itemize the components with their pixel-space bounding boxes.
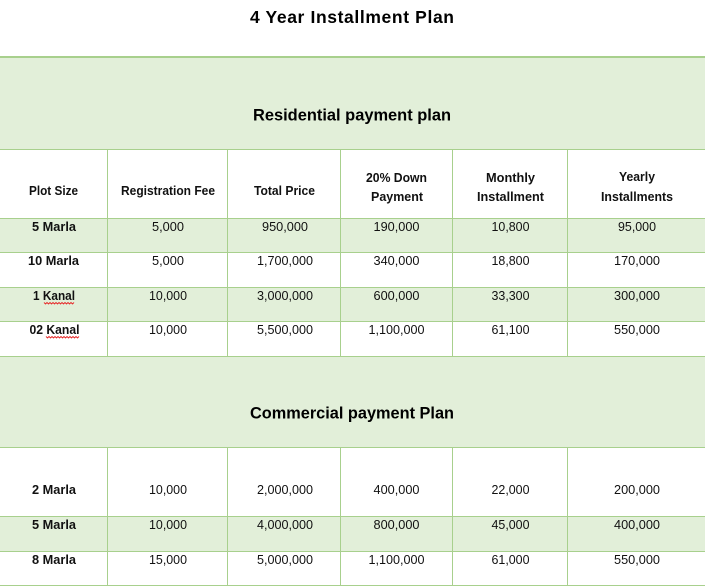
commercial row: 2 Marla: 400,000 bbox=[374, 483, 420, 497]
residential row: 10 Marla: 18,800 bbox=[492, 254, 530, 268]
residential row: 10 Marla: 170,000 bbox=[614, 254, 660, 268]
residential table header row: Monthly bbox=[486, 171, 535, 185]
residential row: 02 Kanal bbox=[30, 323, 660, 338]
residential row: 02 Kanal: 550,000 bbox=[614, 323, 660, 337]
commercial row: 8 Marla: 550,000 bbox=[614, 553, 660, 567]
title: 4 Year Installment Plan bbox=[250, 7, 454, 27]
residential row: 1 Kanal: 3,000,000 bbox=[257, 289, 313, 303]
commercial row: 5 Marla: 4,000,000 bbox=[257, 518, 313, 532]
commercial row: 2 Marla: 2 Marla bbox=[32, 483, 77, 497]
commercial row: 5 Marla bbox=[32, 518, 660, 532]
residential table header row: 20% Down bbox=[366, 171, 427, 185]
residential row: 02 Kanal: 1,100,000 bbox=[368, 323, 425, 337]
residential row: 02 Kanal: 61,100 bbox=[492, 323, 530, 337]
residential table header row: Registration Fee bbox=[121, 184, 215, 198]
residential row: 1 Kanal: 1 Kanal bbox=[33, 289, 75, 303]
commercial row: 5 Marla: 800,000 bbox=[374, 518, 420, 532]
residential row: 5 Marla: 950,000 bbox=[262, 220, 308, 234]
residential row: 5 Marla: 95,000 bbox=[618, 220, 656, 234]
commercial row: 8 Marla: 15,000 bbox=[149, 553, 187, 567]
residential table header row: Yearly bbox=[619, 170, 655, 184]
residential row: 10 Marla: 1,700,000 bbox=[257, 254, 313, 268]
residential row: 1 Kanal: 600,000 bbox=[374, 289, 420, 303]
residential table header row: Total Price bbox=[254, 184, 315, 198]
residential row: 1 Kanal: 33,300 bbox=[492, 289, 530, 303]
commercial row: 2 Marla bbox=[32, 483, 660, 497]
commercial row: 2 Marla: 22,000 bbox=[492, 483, 530, 497]
commercial row: 8 Marla bbox=[32, 553, 660, 567]
commercial row: 2 Marla: 200,000 bbox=[614, 483, 660, 497]
residential row: 5 Marla: 190,000 bbox=[374, 220, 420, 234]
residential row: 5 Marla: 5,000 bbox=[152, 220, 184, 234]
residential row: 02 Kanal: 5,500,000 bbox=[257, 323, 313, 337]
spellcheck underline: Kanal bbox=[44, 302, 74, 304]
commercial row: 8 Marla: 61,000 bbox=[492, 553, 530, 567]
residential row: 1 Kanal: 10,000 bbox=[149, 289, 187, 303]
heading: commercial payment plan: Commercial payment Plan bbox=[250, 404, 454, 422]
residential row: 10 Marla: 340,000 bbox=[374, 254, 420, 268]
residential table header row: Installment bbox=[477, 190, 545, 204]
commercial row: 5 Marla: 400,000 bbox=[614, 518, 660, 532]
residential row: 5 Marla: 10,800 bbox=[492, 220, 530, 234]
residential row: 5 Marla bbox=[32, 220, 656, 234]
heading: residential payment plan: Residential payment plan bbox=[253, 106, 451, 124]
commercial row: 5 Marla: 5 Marla bbox=[32, 518, 77, 532]
commercial row: 8 Marla: 8 Marla bbox=[32, 553, 77, 567]
residential row: 1 Kanal: 300,000 bbox=[614, 289, 660, 303]
commercial row: 2 Marla: 2,000,000 bbox=[257, 483, 313, 497]
commercial row: 8 Marla: 1,100,000 bbox=[368, 553, 425, 567]
residential table header row: Payment bbox=[371, 190, 424, 204]
commercial row: 2 Marla: 10,000 bbox=[149, 483, 187, 497]
residential row: 1 Kanal bbox=[33, 289, 660, 304]
residential row: 10 Marla: 5,000 bbox=[152, 254, 184, 268]
residential table header row: Installments bbox=[601, 190, 673, 204]
residential table header row: Plot Size bbox=[29, 184, 78, 198]
residential row: 10 Marla bbox=[28, 254, 660, 268]
residential row: 5 Marla: 5 Marla bbox=[32, 220, 77, 234]
spellcheck underline: Kanal bbox=[46, 336, 79, 338]
commercial row: 5 Marla: 45,000 bbox=[492, 518, 530, 532]
residential row: 10 Marla: 10 Marla bbox=[28, 254, 80, 268]
commercial row: 5 Marla: 10,000 bbox=[149, 518, 187, 532]
residential table header row bbox=[29, 170, 673, 204]
residential row: 02 Kanal: 10,000 bbox=[149, 323, 187, 337]
commercial row: 8 Marla: 5,000,000 bbox=[257, 553, 313, 567]
residential row: 02 Kanal: 02 Kanal bbox=[30, 323, 80, 337]
